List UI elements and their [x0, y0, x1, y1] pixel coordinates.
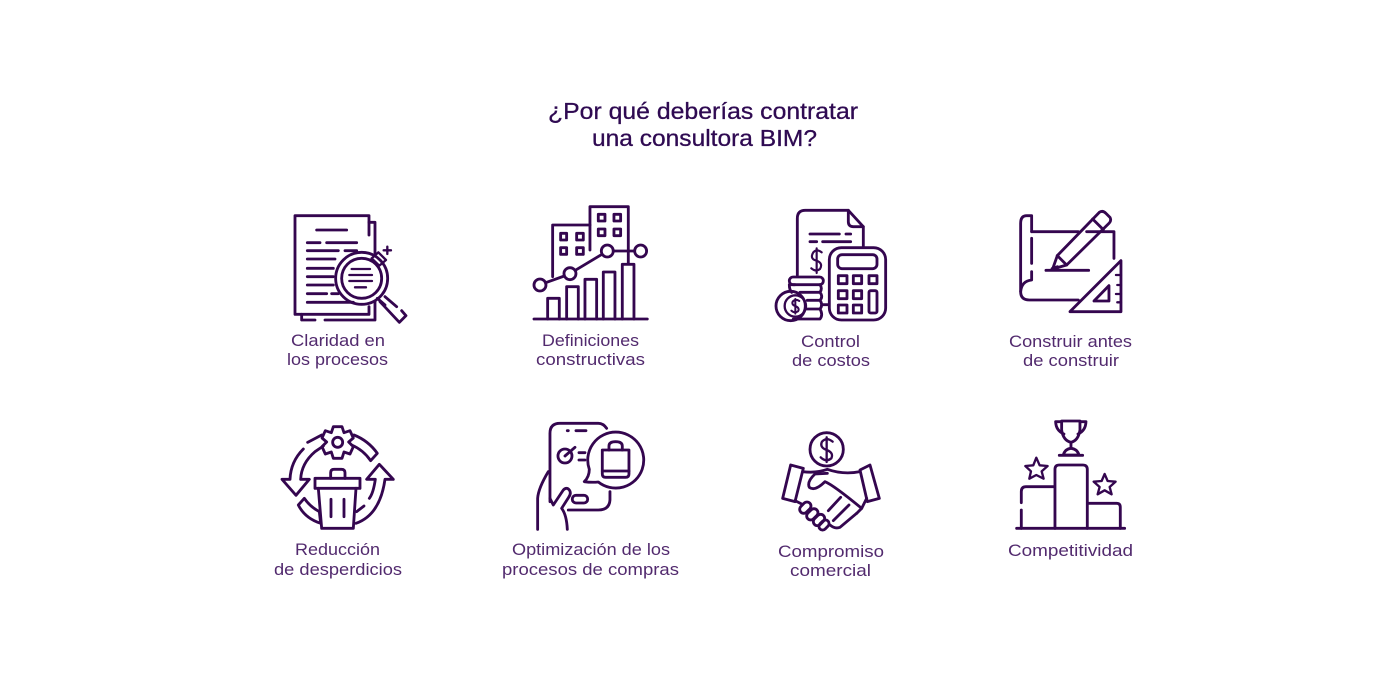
label: [274, 540, 402, 579]
label: Competitividad: [1008, 541, 1133, 560]
title: una consultora BIM?: [592, 125, 817, 151]
icon: podium, trophy and stars: [1017, 421, 1125, 528]
label: los procesos: [287, 350, 388, 369]
icon: invoice, calculator and coins: [776, 210, 886, 321]
panel: construir antes de construir: [1009, 211, 1132, 370]
icon: gear, recycling arrows and bin: [282, 427, 393, 528]
label: Definiciones: [542, 331, 639, 350]
label: de construir: [1023, 351, 1119, 370]
label: [1009, 332, 1132, 370]
label: [502, 540, 679, 579]
label: de desperdicios: [274, 560, 402, 579]
icon: phone with shopping bubble: [538, 423, 644, 529]
panel: optimizacion de compras: [502, 423, 679, 579]
title: [548, 98, 858, 151]
title: ¿Por qué deberías contratar: [548, 98, 858, 124]
label: procesos de compras: [502, 560, 679, 579]
label: Reducción: [295, 540, 380, 559]
label: Control: [801, 332, 860, 351]
panel: claridad en los procesos: [287, 216, 406, 369]
panel: competitividad: [1008, 421, 1133, 560]
label: Optimización de los: [512, 540, 670, 559]
icon: handshake with coin: [783, 433, 879, 532]
panel: control de costos: [776, 210, 886, 370]
panel: reduccion de desperdicios: [274, 427, 402, 579]
icon: buildings and bar chart: [534, 207, 647, 319]
label: constructivas: [536, 350, 645, 369]
label: Compromiso: [778, 542, 884, 561]
label: [778, 542, 884, 580]
label: [792, 332, 870, 370]
label: [287, 331, 388, 369]
label: [536, 331, 645, 369]
label: Construir antes: [1009, 332, 1132, 351]
icon: plan, pencil and set square: [1021, 211, 1121, 312]
label: de costos: [792, 351, 870, 370]
panel: compromiso comercial: [778, 433, 884, 580]
label: comercial: [790, 561, 871, 580]
label: Claridad en: [291, 331, 385, 350]
icon: document with magnifier: [295, 216, 406, 322]
panel: definiciones constructivas: [534, 207, 647, 369]
